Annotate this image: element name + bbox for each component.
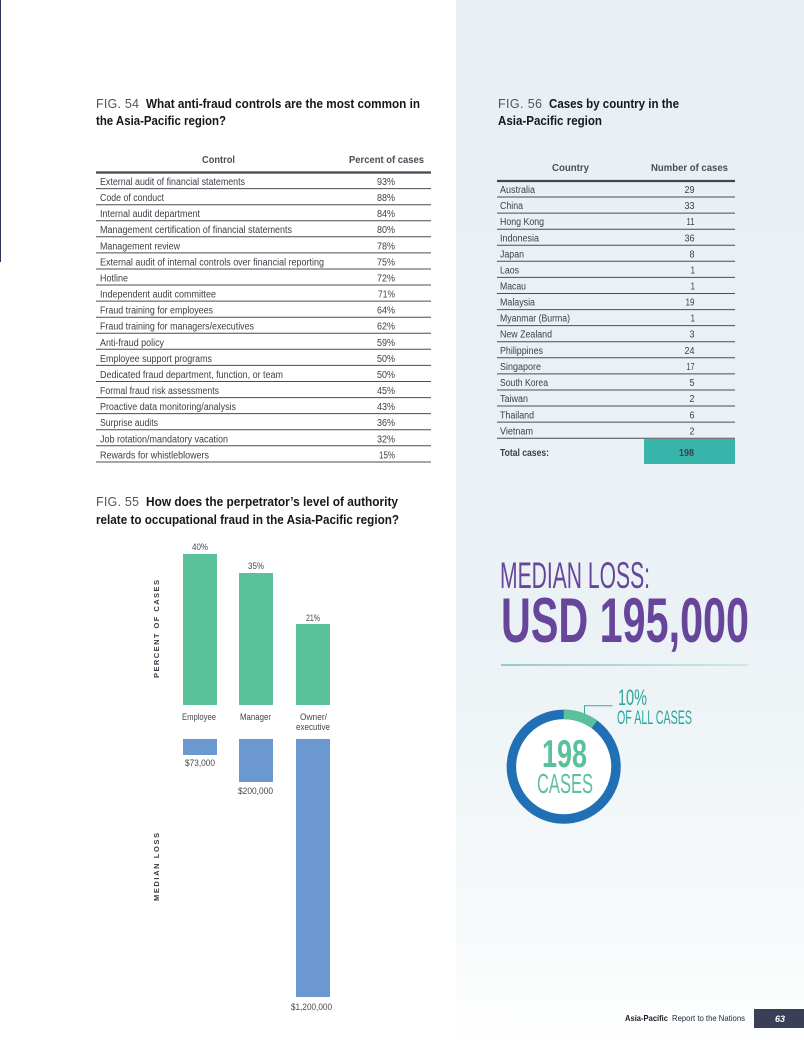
footer: 63 xyxy=(775,1014,785,1024)
bar chart: percent of cases: 21% xyxy=(306,613,320,623)
table rows: 36% xyxy=(377,418,395,429)
table rows: 93% xyxy=(377,177,395,188)
country table rows: Taiwan xyxy=(500,394,528,405)
country table rows: Hong Kong xyxy=(500,217,544,228)
country table rows: 1 xyxy=(690,282,695,292)
country table header: Country xyxy=(552,162,589,174)
heading: figure 55: FIG. 55 xyxy=(96,495,139,509)
footer: Report to the Nations xyxy=(672,1013,745,1023)
country table rows: 8 xyxy=(690,249,695,260)
table rows: 45% xyxy=(377,386,395,397)
category labels: Employee xyxy=(182,712,216,722)
table rows: 15% xyxy=(379,450,395,461)
country table rows: 3 xyxy=(690,330,695,341)
country table rows: Myanmar (Burma) xyxy=(500,314,570,325)
donut chart: 198 cases: 198 xyxy=(542,733,587,776)
total row: Total cases: xyxy=(500,448,549,459)
axis label: median loss: MEDIAN LOSS xyxy=(152,833,161,901)
left edge strip xyxy=(0,0,1,262)
country table rows: 2 xyxy=(690,427,695,438)
table rows: 71% xyxy=(378,290,395,301)
country table rows: Macau xyxy=(500,282,526,292)
country table rows: 33 xyxy=(684,201,695,212)
country table rows: 29 xyxy=(684,185,695,196)
table rows: Employee support programs xyxy=(100,354,212,365)
country table rows: 2 xyxy=(690,394,695,405)
table rows: Management review xyxy=(100,241,181,252)
bar chart: median loss: $1,200,000 xyxy=(291,1002,332,1012)
bar chart: median loss xyxy=(183,739,332,1012)
country table rows: New Zealand xyxy=(500,330,552,341)
heading: figure 54 xyxy=(96,97,420,128)
table rows: Proactive data monitoring/analysis xyxy=(100,402,236,413)
heading: figure 55 xyxy=(96,495,399,527)
table rows: Fraud training for employees xyxy=(100,306,213,317)
table header: Control xyxy=(202,154,235,166)
bar chart: percent of cases: 35% xyxy=(248,561,264,571)
country table rows: 6 xyxy=(690,410,695,422)
table header xyxy=(96,154,431,172)
footer: Asia-Pacific xyxy=(625,1013,668,1023)
country table rows xyxy=(497,185,735,438)
country table header xyxy=(497,162,735,181)
total row: 198 xyxy=(679,448,694,459)
table rows: 32% xyxy=(377,434,395,445)
table rows: Code of conduct xyxy=(100,193,164,204)
callout: 10% of all cases: 10% xyxy=(618,685,647,710)
country table rows: 24 xyxy=(684,346,695,357)
table rows: Surprise audits xyxy=(100,418,158,429)
country table rows: Vietnam xyxy=(500,427,533,438)
country table rows: Japan xyxy=(500,249,524,260)
heading: figure 54: FIG. 54 xyxy=(96,97,139,111)
donut chart: 198 cases: CASES xyxy=(537,768,593,799)
heading: figure 54: the Asia-Pacific region? xyxy=(96,114,226,128)
category labels: executive xyxy=(296,722,330,732)
heading: figure 56 xyxy=(498,97,679,128)
country table rows: 19 xyxy=(686,298,695,309)
country table rows: 17 xyxy=(686,362,695,373)
country table rows: Australia xyxy=(500,185,535,196)
table rows: Anti-fraud policy xyxy=(100,338,164,349)
country table rows: Laos xyxy=(500,265,519,276)
table rows: Fraud training for managers/executives xyxy=(100,322,254,333)
heading: figure 56: Asia-Pacific region xyxy=(498,114,602,128)
category labels xyxy=(182,712,330,732)
right background panel xyxy=(456,0,804,1044)
total row xyxy=(500,439,735,464)
country table rows: 5 xyxy=(690,378,695,389)
table rows: Independent audit committee xyxy=(100,290,216,301)
callout: 10% of all cases: OF ALL CASES xyxy=(617,707,692,729)
table rows: 64% xyxy=(377,306,395,317)
table rows: 59% xyxy=(377,338,395,349)
table rows: 72% xyxy=(377,274,395,284)
country table rows: 11 xyxy=(686,217,695,228)
country table rows: Philippines xyxy=(500,346,543,357)
table rows: 50% xyxy=(377,370,395,381)
divider xyxy=(501,664,748,666)
table rows: Rewards for whistleblowers xyxy=(100,450,209,461)
category labels: Manager xyxy=(240,712,271,722)
table rows: Dedicated fraud department, function, or team xyxy=(100,370,283,381)
bar chart: median loss: $73,000 xyxy=(185,758,215,768)
heading: figure 56: Cases by country in the xyxy=(549,97,679,111)
table rows: 84% xyxy=(377,209,395,220)
country table rows: Indonesia xyxy=(500,233,539,244)
table rows: Formal fraud risk assessments xyxy=(100,386,219,397)
panel: figure 56 country table xyxy=(497,97,735,464)
heading: figure 55: How does the perpetrator’s level of authority xyxy=(146,495,398,509)
callout: median loss xyxy=(500,555,749,656)
table rows: 80% xyxy=(377,225,395,236)
panel: figure 54 controls table xyxy=(96,97,431,462)
country table rows: South Korea xyxy=(500,378,548,389)
country table rows: China xyxy=(500,201,523,212)
table rows: 75% xyxy=(377,257,395,268)
heading: figure 56: FIG. 56 xyxy=(498,97,542,111)
country table rows: 1 xyxy=(690,314,695,325)
table header: Percent of cases xyxy=(349,154,424,166)
panel: figure 55 authority chart xyxy=(96,495,399,1012)
heading: figure 55: relate to occupational fraud in the Asia-Pacific region? xyxy=(96,513,399,527)
callout: median loss: MEDIAN LOSS: xyxy=(500,555,650,596)
table rows: Hotline xyxy=(100,274,128,284)
country table rows: 36 xyxy=(684,233,695,244)
footer xyxy=(625,1009,804,1028)
country table header: Number of cases xyxy=(651,162,728,174)
table rows: Internal audit department xyxy=(100,209,200,220)
category labels: Owner/ xyxy=(300,712,327,722)
table rows: 62% xyxy=(377,322,395,333)
table rows: 88% xyxy=(377,193,395,204)
donut chart: 198 cases xyxy=(507,710,621,824)
table rows xyxy=(96,177,431,462)
table rows: 78% xyxy=(377,241,395,252)
table rows: Job rotation/mandatory vacation xyxy=(100,434,228,445)
bar chart: median loss: $200,000 xyxy=(238,786,273,796)
country table rows: 1 xyxy=(690,265,695,276)
heading: figure 54: What anti-fraud controls are the most common in xyxy=(146,97,420,111)
country table rows: Thailand xyxy=(500,410,534,422)
table rows: 43% xyxy=(377,402,395,413)
table rows: External audit of internal controls over financial reporting xyxy=(100,257,324,268)
table rows: Management certification of financial statements xyxy=(100,225,292,236)
table rows: External audit of financial statements xyxy=(100,177,245,188)
bar chart: percent of cases: 40% xyxy=(192,542,208,552)
country table rows: Singapore xyxy=(500,362,541,373)
table rows: 50% xyxy=(377,354,395,365)
axis label: percent of cases: PERCENT OF CASES xyxy=(152,580,161,678)
country table rows: Malaysia xyxy=(500,298,535,309)
callout: 10% of all cases xyxy=(584,685,692,729)
bar chart: percent of cases xyxy=(183,542,330,705)
